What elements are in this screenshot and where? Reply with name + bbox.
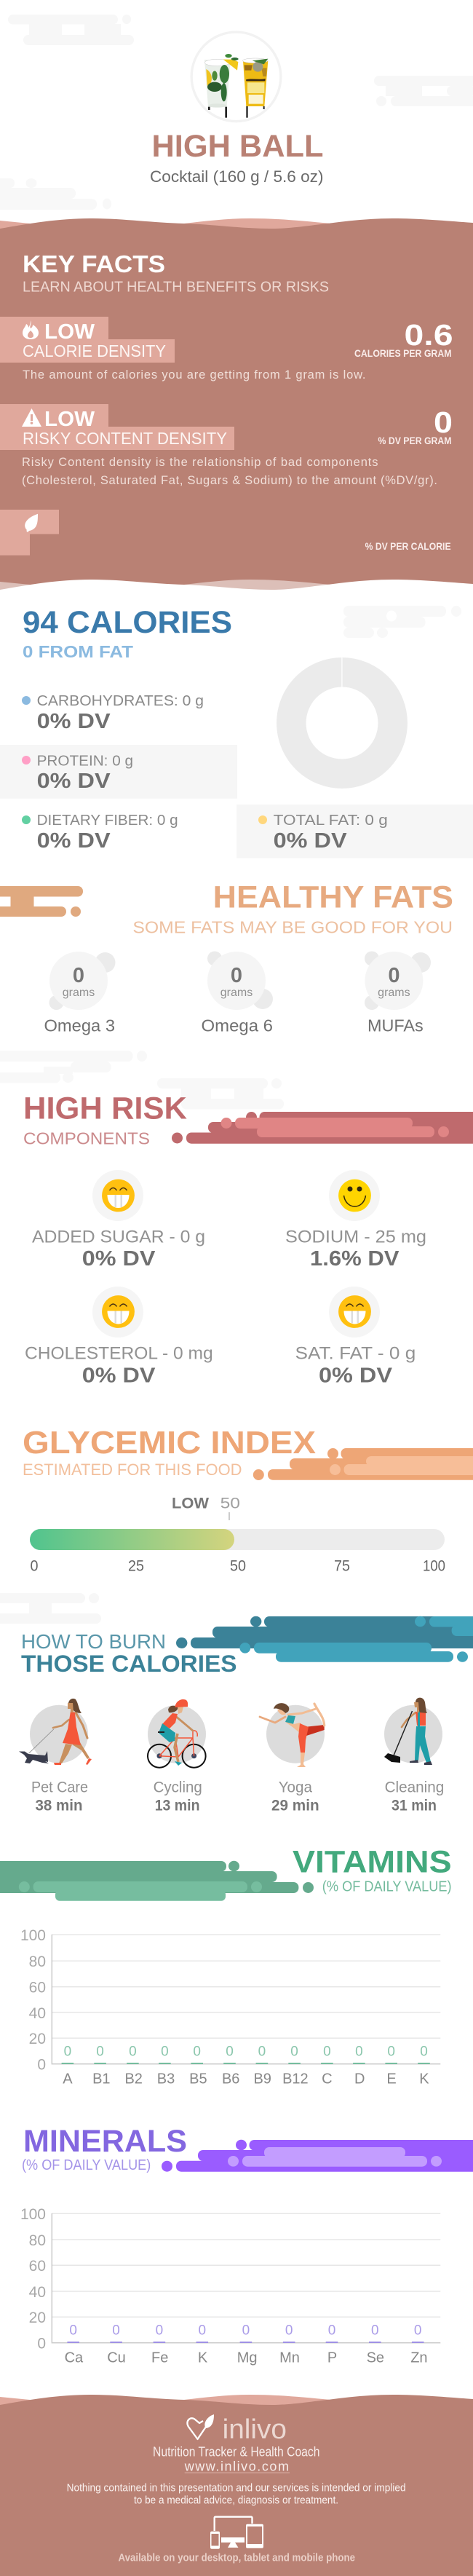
component: added sugar: 0% DV <box>82 1247 156 1271</box>
panel: how to burn those calories <box>19 1616 473 1814</box>
risky content description: Risky Content density is the relationship of bad components <box>22 456 378 469</box>
y axis labels: 0 <box>37 2336 46 2352</box>
panel: footer <box>0 2395 473 2576</box>
activity: cycling: 13 min <box>155 1798 199 1814</box>
bar values: 0 <box>258 2044 266 2059</box>
header blob <box>162 2140 473 2172</box>
icon: woman sweeping <box>384 1698 432 1765</box>
gauge scale <box>31 1558 445 1575</box>
badge label: RISKY CONTENT DENSITY <box>23 429 227 448</box>
background cloud: top left <box>8 15 134 45</box>
macro: protein: PROTEIN: 0 g <box>37 753 133 769</box>
x axis labels: Zn <box>410 2350 428 2366</box>
y axis labels: 40 <box>29 2005 46 2022</box>
x axis labels: K <box>419 2071 429 2087</box>
risky content description <box>22 456 437 487</box>
x axis labels: B6 <box>222 2071 239 2087</box>
macro: carbohydrates <box>22 693 204 733</box>
fat stat: omega 3: Omega 3 <box>44 1016 115 1035</box>
header blob <box>172 1112 473 1144</box>
section heading: GLYCEMIC INDEX <box>23 1425 316 1461</box>
fat stat: MUFAs <box>365 951 431 1035</box>
x axis labels: P <box>327 2350 337 2366</box>
component: saturated fat: 0% DV <box>319 1364 393 1387</box>
y axis labels: 20 <box>29 2031 46 2047</box>
y axis labels: 100 <box>20 2206 46 2223</box>
activity: yoga: 29 min <box>271 1798 319 1814</box>
macro: dietary fiber: DIETARY FIBER: 0 g <box>37 813 178 829</box>
panel: high risk components <box>23 1091 473 1387</box>
activity: cleaning <box>384 1698 444 1814</box>
background cloud: high risk left <box>0 1051 147 1083</box>
disclaimer <box>67 2482 406 2507</box>
section subheading: 0 FROM FAT <box>23 642 133 661</box>
section subheading: SOME FATS MAY BE GOOD FOR YOU <box>132 918 453 937</box>
icon: grinning face <box>102 1295 135 1328</box>
x axis labels: B3 <box>157 2071 175 2087</box>
x axis labels: D <box>354 2071 365 2087</box>
x axis labels: Ca <box>65 2350 84 2366</box>
background cloud: burn <box>0 1593 101 1624</box>
component: saturated fat <box>295 1287 416 1387</box>
risky content description: (Cholesterol, Saturated Fat, Sugars & Sodium) to the amount (%DV/gr). <box>22 474 437 487</box>
bar values <box>64 2044 428 2059</box>
x axis labels: B9 <box>253 2071 271 2087</box>
y axis labels: 80 <box>29 2232 46 2249</box>
bar values: 0 <box>290 2044 298 2059</box>
bar values: 0 <box>69 2323 77 2339</box>
macro: total fat: TOTAL FAT: 0 g <box>274 813 388 829</box>
disclaimer: to be a medical advice, diagnosis or treatment. <box>134 2494 338 2507</box>
bar values: 0 <box>226 2044 234 2059</box>
activity: cleaning: 31 min <box>391 1798 437 1814</box>
tagline: Nutrition Tracker & Health Coach <box>153 2444 320 2459</box>
component: sodium: SODIUM - 25 mg <box>285 1228 426 1247</box>
y axis labels: 60 <box>29 1979 46 1996</box>
bar values: 0 <box>371 2323 379 2339</box>
bottom wave <box>0 580 473 598</box>
calorie density value: 0.6 <box>405 318 453 352</box>
fat stat: omega 3: grams <box>63 987 95 999</box>
header blob <box>0 886 83 917</box>
bar values: 0 <box>355 2044 363 2059</box>
icon: flame <box>23 320 39 339</box>
section heading line 1: HOW TO BURN <box>21 1630 166 1653</box>
fat stat: MUFAs: MUFAs <box>367 1016 424 1035</box>
gauge value label: LOW <box>172 1496 209 1512</box>
section subheading: LEARN ABOUT HEALTH BENEFITS OR RISKS <box>23 280 329 296</box>
rating: LOW <box>44 408 95 431</box>
y axis labels <box>20 1927 46 2074</box>
activity: yoga: Yoga <box>279 1779 312 1796</box>
macro: carbohydrates: CARBOHYDRATES: 0 g <box>37 693 204 709</box>
bars <box>67 2342 424 2343</box>
bar values: 0 <box>64 2044 71 2059</box>
x axis labels: Cu <box>107 2350 126 2366</box>
fat stat: omega 3 <box>44 952 115 1035</box>
x axis labels: A <box>63 2071 73 2087</box>
component: saturated fat: SAT. FAT - 0 g <box>295 1344 416 1364</box>
bar values: 0 <box>156 2323 163 2339</box>
activity: cleaning: Cleaning <box>385 1779 444 1796</box>
background cloud: calories <box>343 606 461 638</box>
risky content density badge <box>0 404 234 450</box>
bar values: 0 <box>112 2323 120 2339</box>
y axis labels: 40 <box>29 2284 46 2301</box>
section heading: 94 CALORIES <box>23 605 232 640</box>
bar values: 0 <box>387 2044 395 2059</box>
macro: total fat <box>236 805 473 858</box>
y axis labels: 20 <box>29 2310 46 2326</box>
logo icon: heart with leaf <box>187 2414 214 2439</box>
section subheading: ESTIMATED FOR THIS FOOD <box>23 1461 242 1479</box>
macro: dietary fiber: 0% DV <box>37 829 111 853</box>
background cloud: top right <box>374 76 473 106</box>
icon: leaf <box>25 514 38 532</box>
per calorie unit: % DV PER CALORIE <box>365 541 451 552</box>
section heading: HIGH RISK <box>23 1091 187 1126</box>
bars <box>62 2063 430 2064</box>
y axis labels: 60 <box>29 2258 46 2275</box>
y axis labels: 80 <box>29 1953 46 1970</box>
panel: minerals <box>20 2124 473 2366</box>
x axis labels: Se <box>367 2350 384 2366</box>
fat stat: omega 6: grams <box>220 987 253 999</box>
x axis labels <box>65 2350 428 2366</box>
x axis labels: B5 <box>189 2071 207 2087</box>
component: sodium: 1.6% DV <box>310 1247 400 1271</box>
donut chart <box>291 657 393 774</box>
macro: total fat: 0% DV <box>274 829 347 853</box>
gauge scale: 100 <box>423 1558 445 1575</box>
bar values: 0 <box>193 2044 201 2059</box>
x axis labels <box>63 2071 429 2087</box>
icon: devices <box>210 2517 263 2549</box>
footer wave <box>0 2395 473 2576</box>
x axis labels: Fe <box>151 2350 168 2366</box>
badge label: CALORIE DENSITY <box>23 341 166 360</box>
activity: cycling <box>148 1699 206 1814</box>
calorie density description: The amount of calories you are getting from 1 gram is low. <box>23 368 365 382</box>
right glass <box>242 58 268 118</box>
macro: carbohydrates: 0% DV <box>37 710 111 733</box>
fat stat: omega 6: Omega 6 <box>201 1016 273 1035</box>
calorie density unit: CALORIES PER GRAM <box>354 348 451 359</box>
activity: pet care <box>19 1699 92 1814</box>
bar values: 0 <box>161 2044 169 2059</box>
nutrient density badge <box>0 510 59 556</box>
risky content unit: % DV PER GRAM <box>378 435 451 446</box>
rating: LOW <box>44 320 95 344</box>
section heading: HEALTHY FATS <box>213 880 453 915</box>
title: HIGH BALL <box>151 129 323 164</box>
top wave <box>0 218 473 591</box>
x axis labels: K <box>198 2350 208 2366</box>
section heading: MINERALS <box>23 2124 187 2159</box>
panel: healthy fats <box>0 880 453 1035</box>
panel: glycemic index <box>23 1425 473 1575</box>
icon: woman walking dog <box>19 1699 92 1765</box>
bar values: 0 <box>285 2323 293 2339</box>
macro: protein <box>0 745 237 799</box>
panel: vitamins <box>0 1845 452 2087</box>
background cloud: high risk center <box>157 1078 284 1110</box>
x axis labels: E <box>386 2071 397 2087</box>
bar values: 0 <box>420 2044 428 2059</box>
activity: yoga <box>260 1703 325 1814</box>
y axis labels <box>20 2206 46 2352</box>
food image: two highball glasses <box>191 32 281 122</box>
icon: grinning face <box>338 1295 371 1328</box>
component: added sugar: ADDED SUGAR - 0 g <box>32 1228 205 1247</box>
x axis labels: C <box>322 2071 333 2087</box>
fat stat: MUFAs: grams <box>378 987 410 999</box>
icon: smiling face <box>338 1180 371 1212</box>
component: cholesterol <box>25 1287 213 1387</box>
component: added sugar <box>32 1170 205 1271</box>
bar values: 0 <box>199 2323 206 2339</box>
website link: www.inlivo.com <box>184 2459 289 2473</box>
bar values: 0 <box>129 2044 137 2059</box>
section heading: VITAMINS <box>293 1845 452 1880</box>
macro: protein: 0% DV <box>37 770 111 793</box>
header blob <box>0 1861 314 1901</box>
section subheading: (% OF DAILY VALUE) <box>22 2157 151 2173</box>
x axis labels: B2 <box>124 2071 143 2087</box>
logo wordmark: inlivo <box>223 2414 287 2445</box>
bar chart: minerals <box>20 2206 440 2366</box>
bar values: 0 <box>328 2323 335 2339</box>
panel: calories <box>0 605 473 858</box>
icon: warning triangle <box>22 408 41 427</box>
subtitle: serving size: Cocktail (160 g / 5.6 oz) <box>150 167 323 186</box>
macro: dietary fiber <box>22 813 178 853</box>
activity: pet care: Pet Care <box>31 1779 88 1796</box>
bar chart: vitamins <box>20 1927 440 2087</box>
gauge scale: 25 <box>128 1558 144 1575</box>
icon: woman cycling <box>148 1699 206 1768</box>
gauge bar <box>30 1529 445 1550</box>
y axis labels: 0 <box>37 2056 46 2074</box>
section subheading: (% OF DAILY VALUE) <box>322 1878 452 1895</box>
section heading: KEY FACTS <box>23 250 165 277</box>
section heading line 2: THOSE CALORIES <box>21 1651 237 1677</box>
header blob <box>176 1616 473 1662</box>
disclaimer: Nothing contained in this presentation and our services is intended or implied <box>67 2482 406 2494</box>
bar values: 0 <box>414 2323 421 2339</box>
bar values: 0 <box>96 2044 104 2059</box>
panel: key facts <box>0 218 473 598</box>
calorie density badge <box>0 317 175 363</box>
x axis labels: Mg <box>237 2350 257 2366</box>
gauge scale: 75 <box>334 1558 350 1575</box>
x axis labels: Mn <box>279 2350 300 2366</box>
availability note: Available on your desktop, tablet and mobile phone <box>118 2551 355 2564</box>
gauge marker <box>228 1512 230 1520</box>
fat stat: omega 6 <box>201 951 273 1035</box>
y axis labels: 100 <box>20 1927 46 1944</box>
x axis labels: B12 <box>282 2071 309 2087</box>
background cloud: mid left <box>0 178 111 210</box>
bar values: 0 <box>323 2044 331 2059</box>
bar values: 0 <box>242 2323 250 2339</box>
image ring <box>191 32 281 122</box>
section subheading: COMPONENTS <box>23 1129 150 1148</box>
fat stat: MUFAs: 0 <box>388 964 400 987</box>
fat stat: omega 3: 0 <box>73 964 84 987</box>
gauge value label: 50 <box>220 1496 240 1512</box>
bar values <box>69 2323 421 2339</box>
icon: grinning face <box>102 1180 135 1212</box>
component: cholesterol: CHOLESTEROL - 0 mg <box>25 1344 213 1364</box>
x axis labels: B1 <box>92 2071 111 2087</box>
fat stat: omega 6: 0 <box>231 964 242 987</box>
gauge scale: 50 <box>230 1558 246 1575</box>
icon: woman in dancer pose <box>260 1703 325 1767</box>
component: sodium <box>285 1170 426 1271</box>
component: cholesterol: 0% DV <box>82 1364 156 1387</box>
activity: pet care: 38 min <box>35 1798 83 1814</box>
header blob <box>253 1448 473 1480</box>
left glass <box>204 54 239 118</box>
activity: cycling: Cycling <box>154 1779 202 1796</box>
gauge scale: 0 <box>31 1558 38 1575</box>
gauge value label <box>172 1496 240 1512</box>
risky content value: 0 <box>434 406 453 439</box>
